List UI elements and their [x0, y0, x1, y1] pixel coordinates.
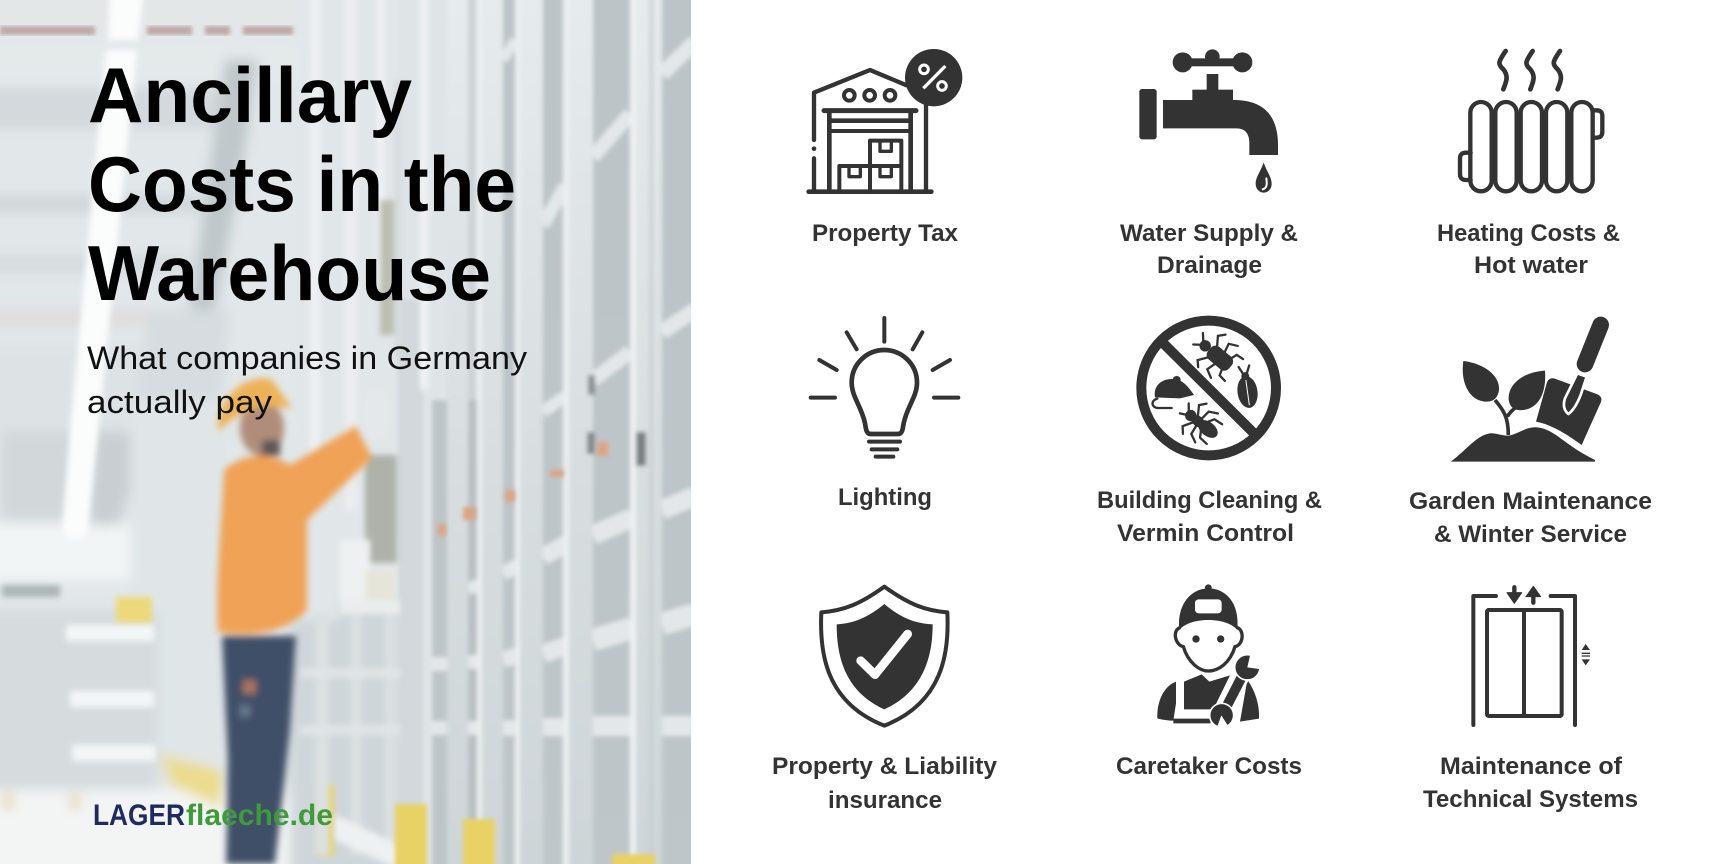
icon: radiator with steam — [1460, 51, 1602, 191]
shelf beams — [432, 40, 695, 728]
subtitle: actually pay — [87, 384, 272, 420]
label: garden maintenance and winter service: Garden Maintenance — [1409, 488, 1652, 515]
label: building cleaning and vermin control: Building Cleaning & — [1097, 487, 1322, 514]
cell: property tax — [809, 49, 962, 247]
label: maintenance of technical systems: Maintenance of — [1440, 753, 1623, 780]
title: Warehouse — [88, 229, 491, 317]
icon: shield with check — [821, 587, 948, 726]
icon: no pests sign — [1141, 321, 1276, 455]
shelf block — [2, 585, 334, 855]
label: property and liability insurance: insurance — [828, 787, 942, 814]
cell: water supply — [1120, 49, 1298, 279]
worker figure — [217, 378, 390, 864]
label: property tax: Property Tax — [812, 220, 959, 247]
cell: heating — [1437, 51, 1620, 279]
icon: elevator — [1473, 586, 1590, 725]
label: building cleaning and vermin control — [1097, 487, 1322, 547]
title: Costs in the — [88, 140, 516, 228]
icon: water tap with drop — [1139, 49, 1278, 193]
label: lighting: Lighting — [838, 484, 932, 511]
label: maintenance of technical systems: Technical Systems — [1423, 786, 1638, 813]
label: garden maintenance and winter service: & Winter Service — [1434, 521, 1627, 548]
logo: LAGERflaeche.de: flaeche.de — [186, 799, 333, 832]
subtitle: What companies in Germany — [87, 340, 527, 376]
label: property and liability insurance — [772, 753, 998, 814]
title: Ancillary — [88, 51, 412, 139]
label: water supply and drainage: Water Supply & — [1120, 220, 1298, 247]
icon: warehouse with percent badge — [809, 49, 962, 192]
panel: blurred warehouse photo — [0, 0, 700, 864]
icon: plant and trowel — [1451, 325, 1601, 462]
logo: LAGERflaeche.de: LAGER — [93, 799, 185, 832]
label: water supply and drainage — [1120, 220, 1298, 279]
title — [88, 51, 516, 317]
cell: insurance — [772, 587, 998, 814]
ceiling light strip — [62, 0, 144, 539]
cell: technical systems — [1423, 586, 1638, 813]
cell: caretaker — [1116, 584, 1302, 780]
label: heating costs and hot water — [1437, 220, 1620, 279]
cell: garden — [1409, 325, 1652, 548]
label: water supply and drainage: Drainage — [1157, 252, 1262, 279]
orange markers — [438, 442, 608, 536]
label: garden maintenance and winter service — [1409, 488, 1652, 548]
subtitle — [87, 340, 527, 420]
label: caretaker costs: Caretaker Costs — [1116, 753, 1302, 780]
label: maintenance of technical systems — [1423, 753, 1638, 813]
far rack streaks — [300, 0, 428, 864]
yellow bollards — [395, 804, 655, 864]
rack structure — [398, 0, 700, 864]
label: heating costs and hot water: Hot water — [1474, 252, 1588, 279]
label: building cleaning and vermin control: Vermin Control — [1117, 520, 1294, 547]
label: heating costs and hot water: Heating Costs & — [1437, 220, 1620, 247]
icon: light bulb — [811, 318, 958, 457]
label: property and liability insurance: Property & Liability — [772, 753, 998, 780]
red ceiling dashes — [0, 26, 293, 35]
logo: LAGERflaeche.de — [93, 799, 333, 832]
cell: lighting — [811, 318, 958, 511]
cell: building cleaning — [1097, 321, 1322, 547]
icon: caretaker with wrench — [1157, 584, 1263, 730]
